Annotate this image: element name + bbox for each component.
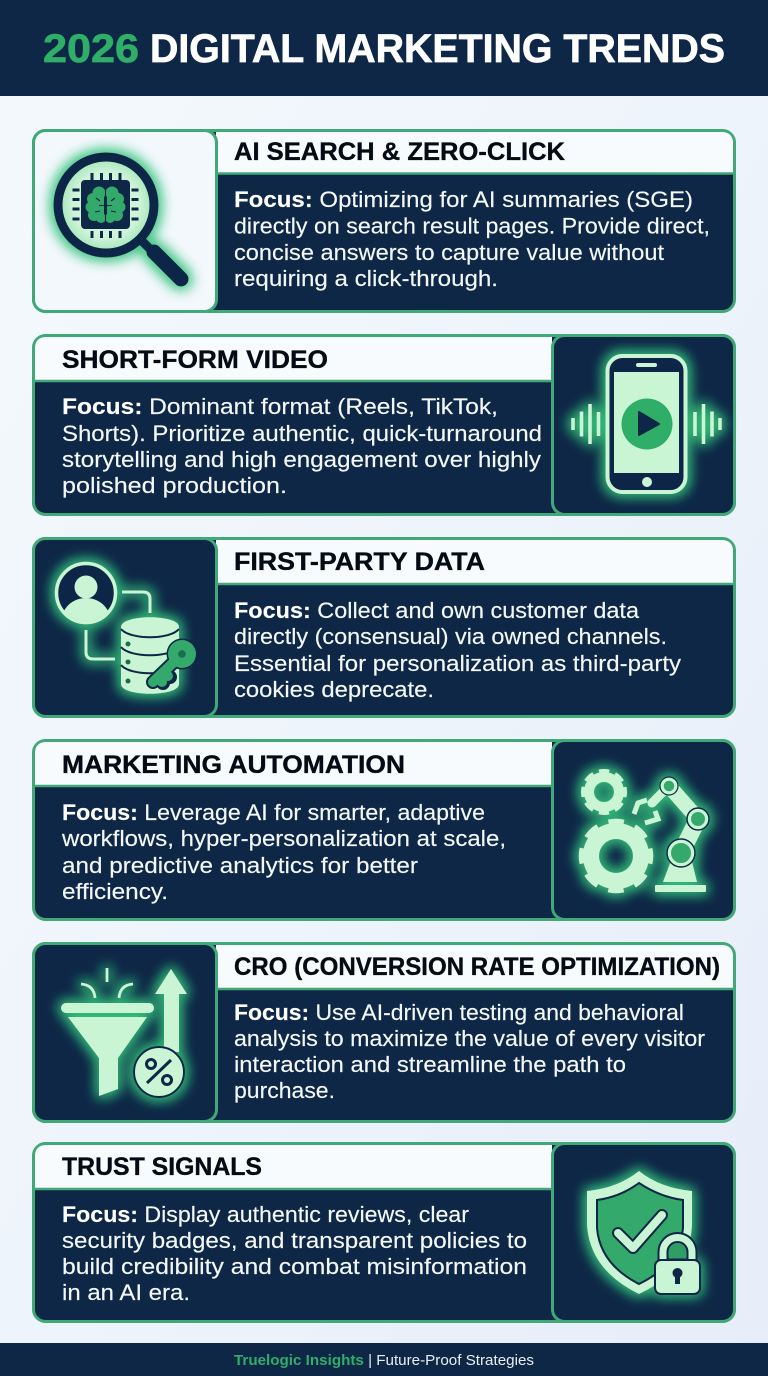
- icon: user, database and key: [56, 564, 198, 694]
- text block: Shorts). Prioritize authentic, quick-turnaround: [62, 421, 542, 446]
- text block: Focus: Optimizing for AI summaries (SGE): [234, 187, 693, 212]
- text block: Focus: Leverage AI for smarter, adaptive: [62, 800, 485, 825]
- text block: and predictive analytics for better: [62, 853, 418, 878]
- panel: CRO: [34, 944, 735, 1122]
- text block: [62, 1202, 527, 1305]
- text block: polished production.: [62, 473, 287, 498]
- icon: magnifier with AI chip: [58, 157, 181, 279]
- text block: storytelling and high engagement over highly: [62, 447, 541, 472]
- text block: directly (consensual) via owned channels.: [234, 624, 667, 649]
- header band: [0, 0, 768, 96]
- text block: security badges, and transparent policies to: [62, 1228, 527, 1253]
- text block: in an AI era.: [62, 1280, 190, 1305]
- heading: FIRST-PARTY DATA: [234, 548, 485, 576]
- panel: first-party data: [34, 538, 735, 716]
- text block: [61, 800, 506, 904]
- icon: gears and robot arm: [582, 772, 709, 892]
- heading: MARKETING AUTOMATION: [62, 751, 405, 779]
- footer: [0, 1343, 768, 1376]
- footer: Truelogic Insights | Future-Proof Strategies: [234, 1353, 534, 1369]
- icon: phone with play button: [573, 356, 720, 492]
- text block: [234, 1000, 705, 1103]
- heading: TRUST SIGNALS: [62, 1153, 262, 1181]
- icon: funnel with percent and arrow: [61, 968, 187, 1097]
- title: DIGITAL MARKETING TRENDS: [150, 27, 725, 71]
- panel: trust signals: [33, 1144, 734, 1322]
- text block: [62, 394, 542, 498]
- panel: short-form video: [33, 336, 734, 514]
- heading: CRO (CONVERSION RATE OPTIMIZATION): [234, 953, 720, 981]
- icon: shield with check and padlock: [587, 1171, 700, 1294]
- title: 2026: [43, 27, 139, 71]
- text block: requiring a click-through.: [234, 266, 498, 291]
- text block: concise answers to capture value without: [234, 240, 664, 265]
- text block: build credibility and combat misinformation: [62, 1254, 527, 1279]
- text block: [234, 187, 710, 291]
- text block: Focus: Dominant format (Reels, TikTok,: [62, 394, 498, 419]
- panel: AI search and zero-click: [34, 130, 735, 312]
- text block: efficiency.: [62, 879, 168, 904]
- text block: Focus: Use AI-driven testing and behavioral: [234, 1000, 684, 1025]
- text block: Focus: Display authentic reviews, clear: [62, 1202, 469, 1227]
- text block: Focus: Collect and own customer data: [234, 598, 640, 623]
- text block: interaction and streamline the path to: [234, 1052, 626, 1077]
- text block: [234, 598, 681, 702]
- text block: Essential for personalization as third-party: [234, 651, 681, 676]
- heading: AI SEARCH & ZERO-CLICK: [234, 138, 565, 166]
- text block: cookies deprecate.: [234, 677, 434, 702]
- text block: directly on search result pages. Provide direct,: [234, 214, 710, 238]
- heading: SHORT-FORM VIDEO: [62, 346, 328, 374]
- panel: marketing automation: [33, 740, 734, 920]
- text block: purchase.: [234, 1078, 335, 1103]
- text block: workflows, hyper-personalization at scale,: [61, 826, 506, 851]
- text block: analysis to maximize the value of every visitor: [234, 1026, 705, 1051]
